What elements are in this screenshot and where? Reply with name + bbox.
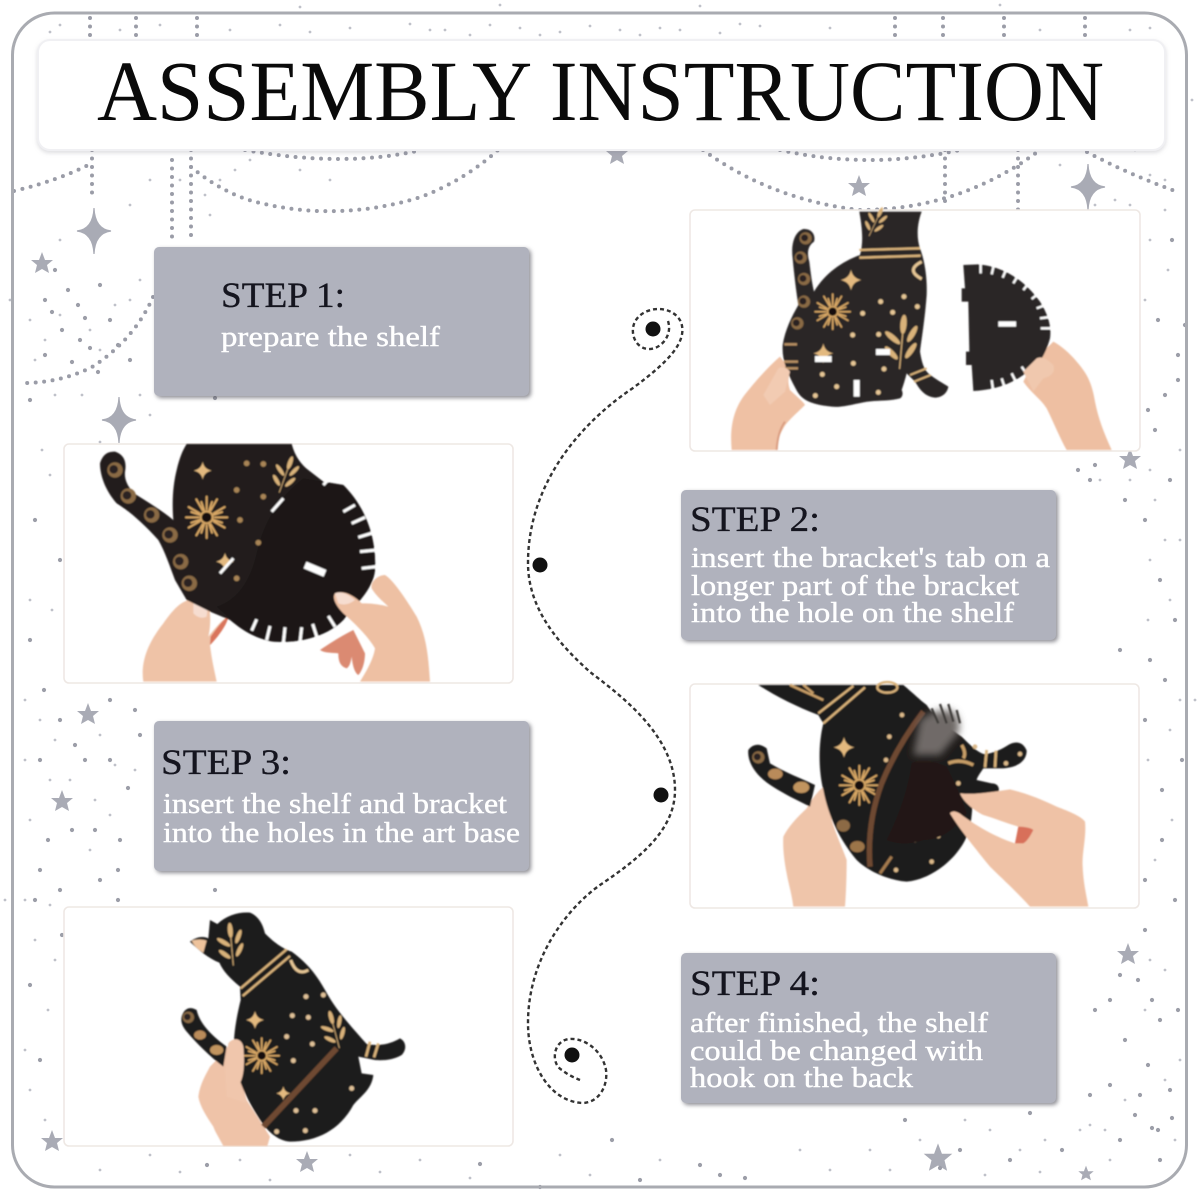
step 3 heading: STEP 3: bbox=[161, 742, 291, 782]
photo panel: inserting the bracket bbox=[690, 682, 1139, 908]
left hand bbox=[731, 357, 805, 450]
photo panel: bracket held on shelf bbox=[64, 444, 513, 683]
cat shelf with bracket disc bbox=[100, 444, 377, 643]
step 4 text: could be changed with bbox=[690, 1035, 984, 1067]
cat shelf bbox=[181, 912, 405, 1142]
step 1 card bbox=[154, 247, 529, 396]
left hand thumb bbox=[763, 367, 790, 405]
right hand bbox=[1023, 342, 1112, 450]
step marker dot 3 bbox=[654, 788, 668, 802]
step 2 text bbox=[691, 542, 1050, 629]
bracket piece bbox=[962, 263, 1053, 392]
step 2 heading: STEP 2: bbox=[690, 499, 820, 539]
right hand bbox=[950, 789, 1088, 907]
title banner bbox=[38, 40, 1165, 150]
cat shelf bbox=[783, 203, 948, 407]
step 1 text: prepare the shelf bbox=[221, 321, 440, 353]
step 2 card bbox=[681, 490, 1056, 640]
step marker dot 2 bbox=[532, 558, 548, 572]
step 3 text: into the holes in the art base bbox=[163, 817, 520, 849]
step 2 text: longer part of the bracket bbox=[691, 570, 1019, 602]
thumb bbox=[225, 1039, 247, 1103]
hand back bbox=[198, 1043, 270, 1146]
right hand bbox=[320, 630, 365, 675]
right hand thumb bbox=[1023, 357, 1054, 392]
cat shelf with inserted bracket bbox=[748, 682, 1027, 882]
step 4 text: hook on the back bbox=[690, 1062, 914, 1094]
step marker dot 4 bbox=[564, 1048, 580, 1062]
step 4 text bbox=[690, 1007, 988, 1094]
photo panel: cat shelf and bracket pieces bbox=[690, 203, 1140, 451]
step 1 heading: STEP 1: bbox=[221, 275, 345, 315]
step 2 text: into the hole on the shelf bbox=[691, 597, 1014, 629]
dashed connector path bbox=[528, 309, 682, 1103]
step marker dot 1 bbox=[646, 322, 660, 336]
step 3 text bbox=[163, 788, 520, 849]
left hand bbox=[783, 787, 847, 907]
step 4 text: after finished, the shelf bbox=[690, 1007, 988, 1039]
title: ASSEMBLY INSTRUCTION bbox=[97, 43, 1104, 139]
step 4 card bbox=[681, 953, 1056, 1103]
left hand bbox=[143, 597, 228, 682]
step 4 heading: STEP 4: bbox=[690, 963, 820, 1003]
step 2 text: insert the bracket's tab on a bbox=[691, 542, 1050, 574]
step 3 card bbox=[154, 721, 529, 871]
photo panel: assembled cat shelf bbox=[64, 907, 513, 1146]
step 3 text: insert the shelf and bracket bbox=[163, 788, 507, 820]
